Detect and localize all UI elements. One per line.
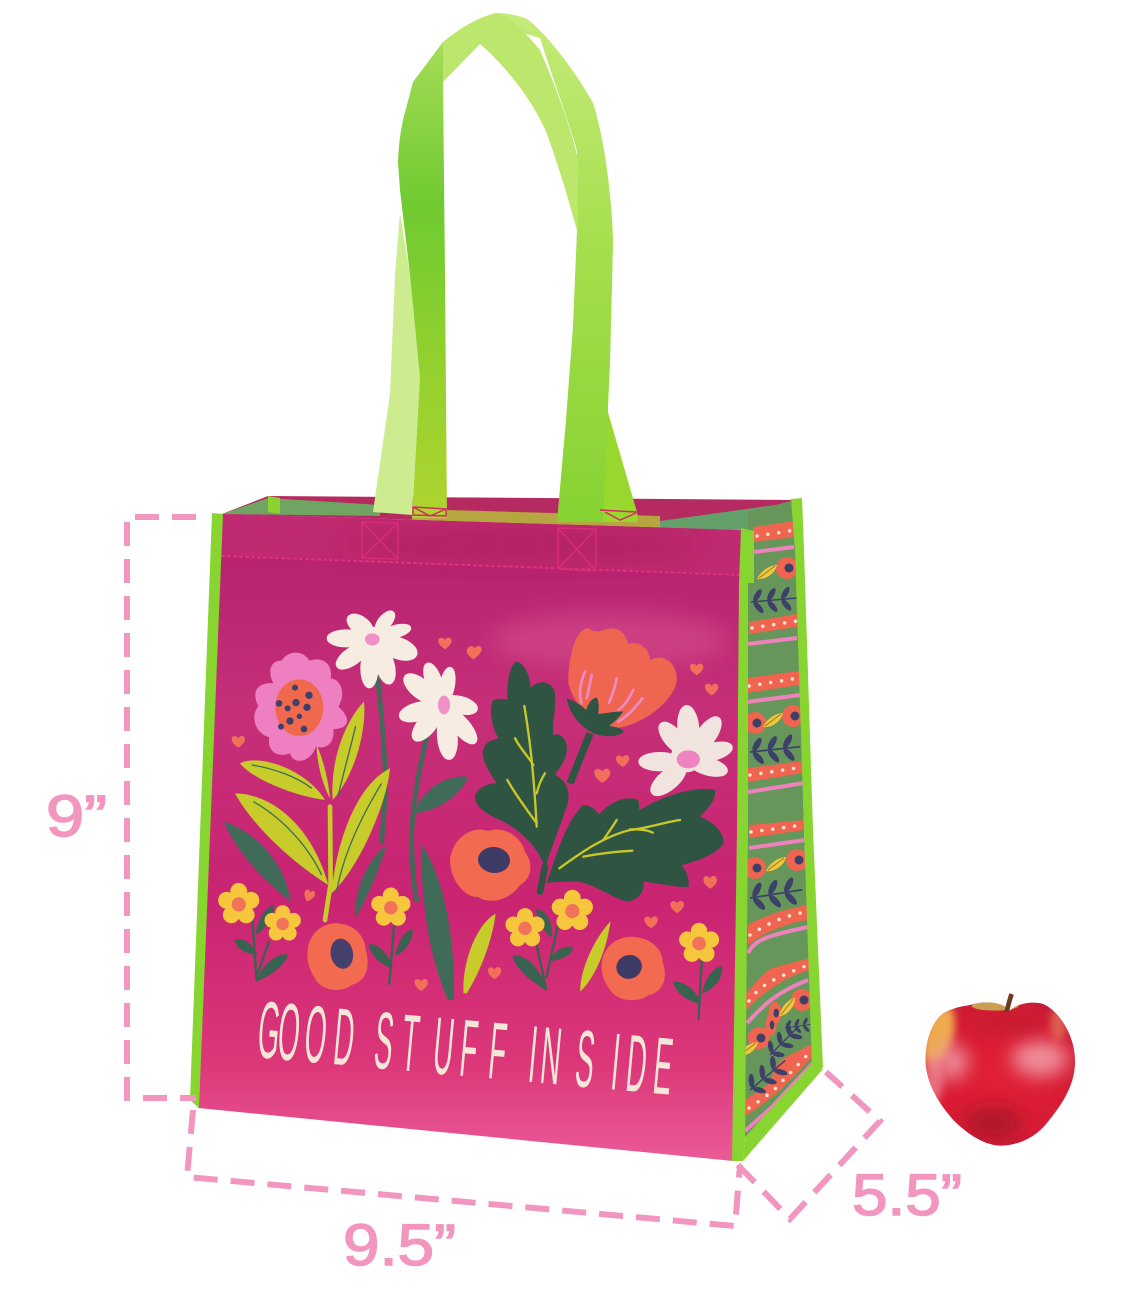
side flowers and leaves [746,557,810,1055]
green stems [377,670,427,900]
hearts [232,638,480,903]
left strap [398,42,447,518]
white daisy middle [399,662,480,759]
white daisy top [328,609,419,687]
front green bindings [190,513,754,1161]
dimension: width 9.5 inches [187,1110,740,1278]
apple shading [926,1008,960,1068]
side sprigs [748,586,810,1094]
strap stitches [413,507,637,520]
side green binding [743,498,823,1161]
leaf veins [252,726,382,892]
center long leaf [422,845,454,1000]
apple stem [1007,994,1012,1012]
side dots [749,530,812,1108]
white daisy right [640,706,733,799]
dimension: depth 5.5 inches: 5.5” [852,1163,962,1228]
yellow leaves [235,702,390,920]
handles [373,13,638,522]
dimension: height 9 inches: 9” [46,784,107,849]
poppies [307,923,665,1000]
side orange stripes [745,521,814,1116]
tulip lines [580,672,642,722]
stem and dark leaves [475,662,723,902]
hearts [414,877,717,991]
back handle outer strap [490,13,613,515]
yellow blades [463,914,611,993]
slogan: GOOD STUFF INSIDE [254,984,676,1112]
pale lower left strap [373,213,420,515]
floral artwork: left cluster [224,609,480,920]
dimension: width 9.5 inches: 9.5” [343,1213,456,1278]
stitched strap squares [362,522,596,571]
small dark leaves [234,905,722,1004]
side pink stripes [745,547,813,1131]
tulip [568,628,677,728]
dark leaves [224,777,468,918]
right strap [557,230,613,522]
hearts [468,646,718,913]
side panel [745,501,812,1137]
back handle tail [600,409,638,522]
poppy large [450,829,530,901]
bag interior [222,496,800,530]
leaf veins [507,706,680,868]
pink flower [254,653,347,761]
stems [252,917,702,1020]
floral artwork: right cluster [468,628,733,913]
dimension: depth 5.5 inches [738,1072,962,1228]
apple [916,994,1075,1146]
yellow flowers [218,883,719,962]
dimension: height 9 inches [46,517,196,1098]
floral artwork: bottom row [218,877,722,1020]
front handle arc [443,13,578,234]
bag front panel [198,514,741,1161]
